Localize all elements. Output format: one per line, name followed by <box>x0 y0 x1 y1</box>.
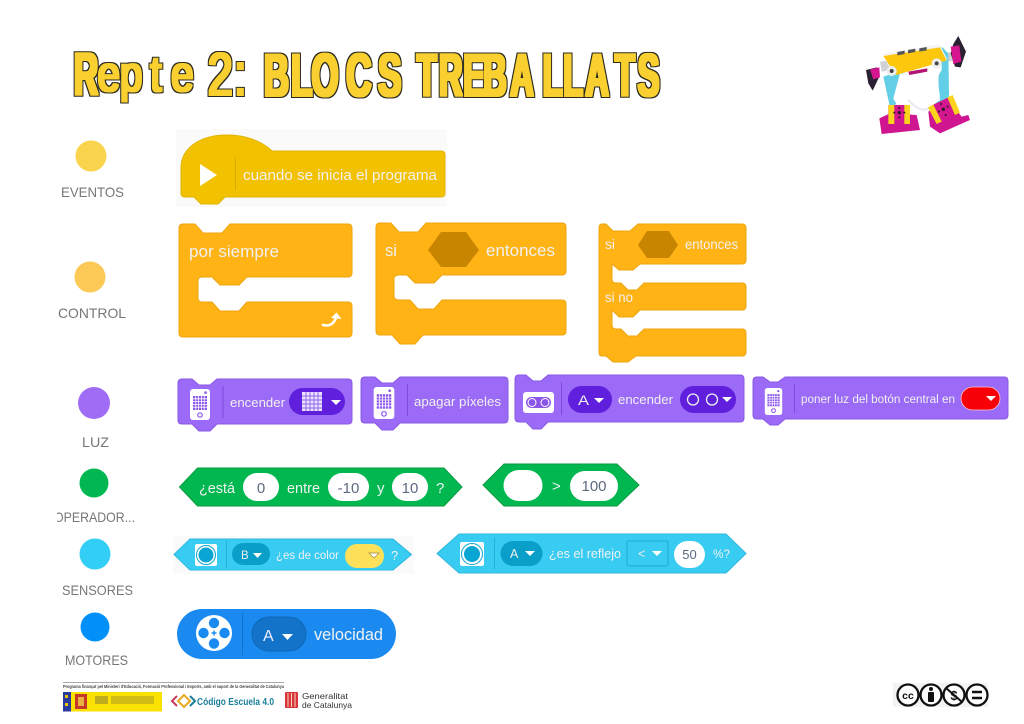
block: mayor que <box>483 464 639 506</box>
input: -10 <box>328 473 369 501</box>
icon: colour sensor <box>195 544 217 566</box>
dropdown: port A <box>252 617 306 651</box>
title: epte <box>98 46 193 102</box>
icon: SPIKE Prime robot <box>866 36 970 134</box>
category: OPERADORES: OPERADOR... <box>54 509 135 525</box>
category: OPERADORES <box>54 468 135 525</box>
dropdown: eyes <box>680 386 736 413</box>
input: -10: -10 <box>338 480 359 497</box>
block: encender ojos <box>515 375 744 429</box>
icon: motor <box>196 615 232 651</box>
input: 0: 0 <box>257 480 265 497</box>
category: LUZ <box>78 387 110 450</box>
icon: hub <box>765 388 782 415</box>
block: si entonces: si <box>385 241 397 260</box>
icon: hub <box>190 389 210 420</box>
input: 50: 50 <box>682 547 697 562</box>
block: encender matriz <box>178 379 352 431</box>
dropdown: port A <box>568 386 612 413</box>
footer: funding text: Programa finançat pel Ministeri d'Educació, Formació Professional i Esports, amb el suport de la Generalitat de Catalunya <box>63 684 284 690</box>
dropdown: port A <box>500 541 542 566</box>
dropdown: matrix <box>289 388 345 415</box>
licence: creative commons icons: cc <box>902 690 914 702</box>
block: mayor que: > <box>552 478 561 495</box>
block: poner luz del botón central <box>753 377 1008 425</box>
block: si entonces si no: si no <box>605 290 633 305</box>
block: es el reflejo: ¿es el reflejo <box>549 547 621 561</box>
icon: loop arrow <box>323 317 336 325</box>
block: es de color: ? <box>391 548 398 563</box>
category: MOTORES <box>65 612 128 668</box>
block: es el reflejo <box>437 534 746 573</box>
dropdown: less than <box>627 541 668 566</box>
dropdown: red colour <box>961 387 1000 410</box>
block: si entonces: entonces <box>486 241 555 260</box>
block: encender matriz: encender <box>230 395 286 410</box>
block: si entonces <box>376 223 566 344</box>
hexagon slot <box>428 232 479 267</box>
dropdown: port A: A <box>578 392 590 408</box>
block: si entonces si no <box>599 224 746 362</box>
block: por siempre <box>179 224 352 337</box>
block: si entonces si no: si <box>605 237 615 252</box>
block: velocidad <box>177 609 396 659</box>
licence: creative commons icons <box>893 683 988 707</box>
block: está entre: ? <box>436 480 444 497</box>
category: SENSORES: SENSORES <box>62 582 133 598</box>
input: 50 <box>674 541 705 568</box>
footer: Generalitat de Catalunya <box>285 691 352 710</box>
footer: Generalitat de Catalunya: Generalitat <box>302 691 349 701</box>
title <box>74 42 659 110</box>
dropdown: port B: B <box>241 550 249 562</box>
category: EVENTOS: EVENTOS <box>61 184 124 200</box>
category: CONTROL: CONTROL <box>58 305 126 321</box>
title: BLOCS <box>264 43 401 109</box>
footer: Generalitat de Catalunya: de Catalunya <box>302 700 352 710</box>
licence: creative commons icons: $ <box>950 688 958 703</box>
footer: Código Escuela 4.0: Código Escuela 4.0 <box>197 696 274 708</box>
block: velocidad: velocidad <box>314 626 383 644</box>
block: es de color: ¿es de color <box>276 550 339 562</box>
block: cuando se inicia el programa <box>176 129 447 207</box>
block: está entre: ¿está <box>199 480 236 497</box>
title: R <box>74 42 98 109</box>
block: está entre: y <box>377 480 385 497</box>
hexagon slot <box>638 231 678 258</box>
category: MOTORES: MOTORES <box>65 652 128 668</box>
dropdown: port A: A <box>263 628 274 645</box>
dropdown: less than: < <box>638 547 645 561</box>
footer: government logo <box>63 692 162 712</box>
title: 2: <box>208 42 247 109</box>
input: 100 <box>570 471 618 501</box>
input: 10: 10 <box>402 480 418 497</box>
block: por siempre: por siempre <box>189 242 279 261</box>
icon: colour sensor <box>460 542 484 566</box>
category: SENSORES <box>62 538 133 598</box>
dropdown: port A: A <box>510 547 519 561</box>
block: encender ojos: encender <box>618 392 674 407</box>
block: poner luz del botón central: poner luz del botón central en <box>801 394 955 406</box>
dropdown: yellow colour <box>345 544 384 568</box>
category: EVENTOS <box>61 140 124 200</box>
icon: play <box>200 164 217 186</box>
block: está entre: entre <box>287 480 320 497</box>
footer: Código Escuela 4.0 <box>172 695 274 708</box>
block: si entonces si no: entonces <box>685 237 738 252</box>
input: 100: 100 <box>581 478 607 495</box>
block: es el reflejo: %? <box>713 547 730 561</box>
block: apagar píxeles <box>361 377 508 430</box>
input: 0 <box>243 473 279 501</box>
block: apagar píxeles: apagar píxeles <box>414 394 502 409</box>
block: cuando se inicia el programa: cuando se inicia el programa <box>243 167 438 184</box>
input: 10 <box>392 473 428 501</box>
category: CONTROL <box>58 262 126 321</box>
block: está entre <box>180 468 462 506</box>
title: TREBALLATS <box>417 42 659 110</box>
dropdown: port B <box>232 543 270 565</box>
icon: distance sensor <box>523 392 554 413</box>
icon: hub <box>374 387 394 419</box>
block: es de color <box>173 536 414 574</box>
category: LUZ: LUZ <box>82 434 109 450</box>
